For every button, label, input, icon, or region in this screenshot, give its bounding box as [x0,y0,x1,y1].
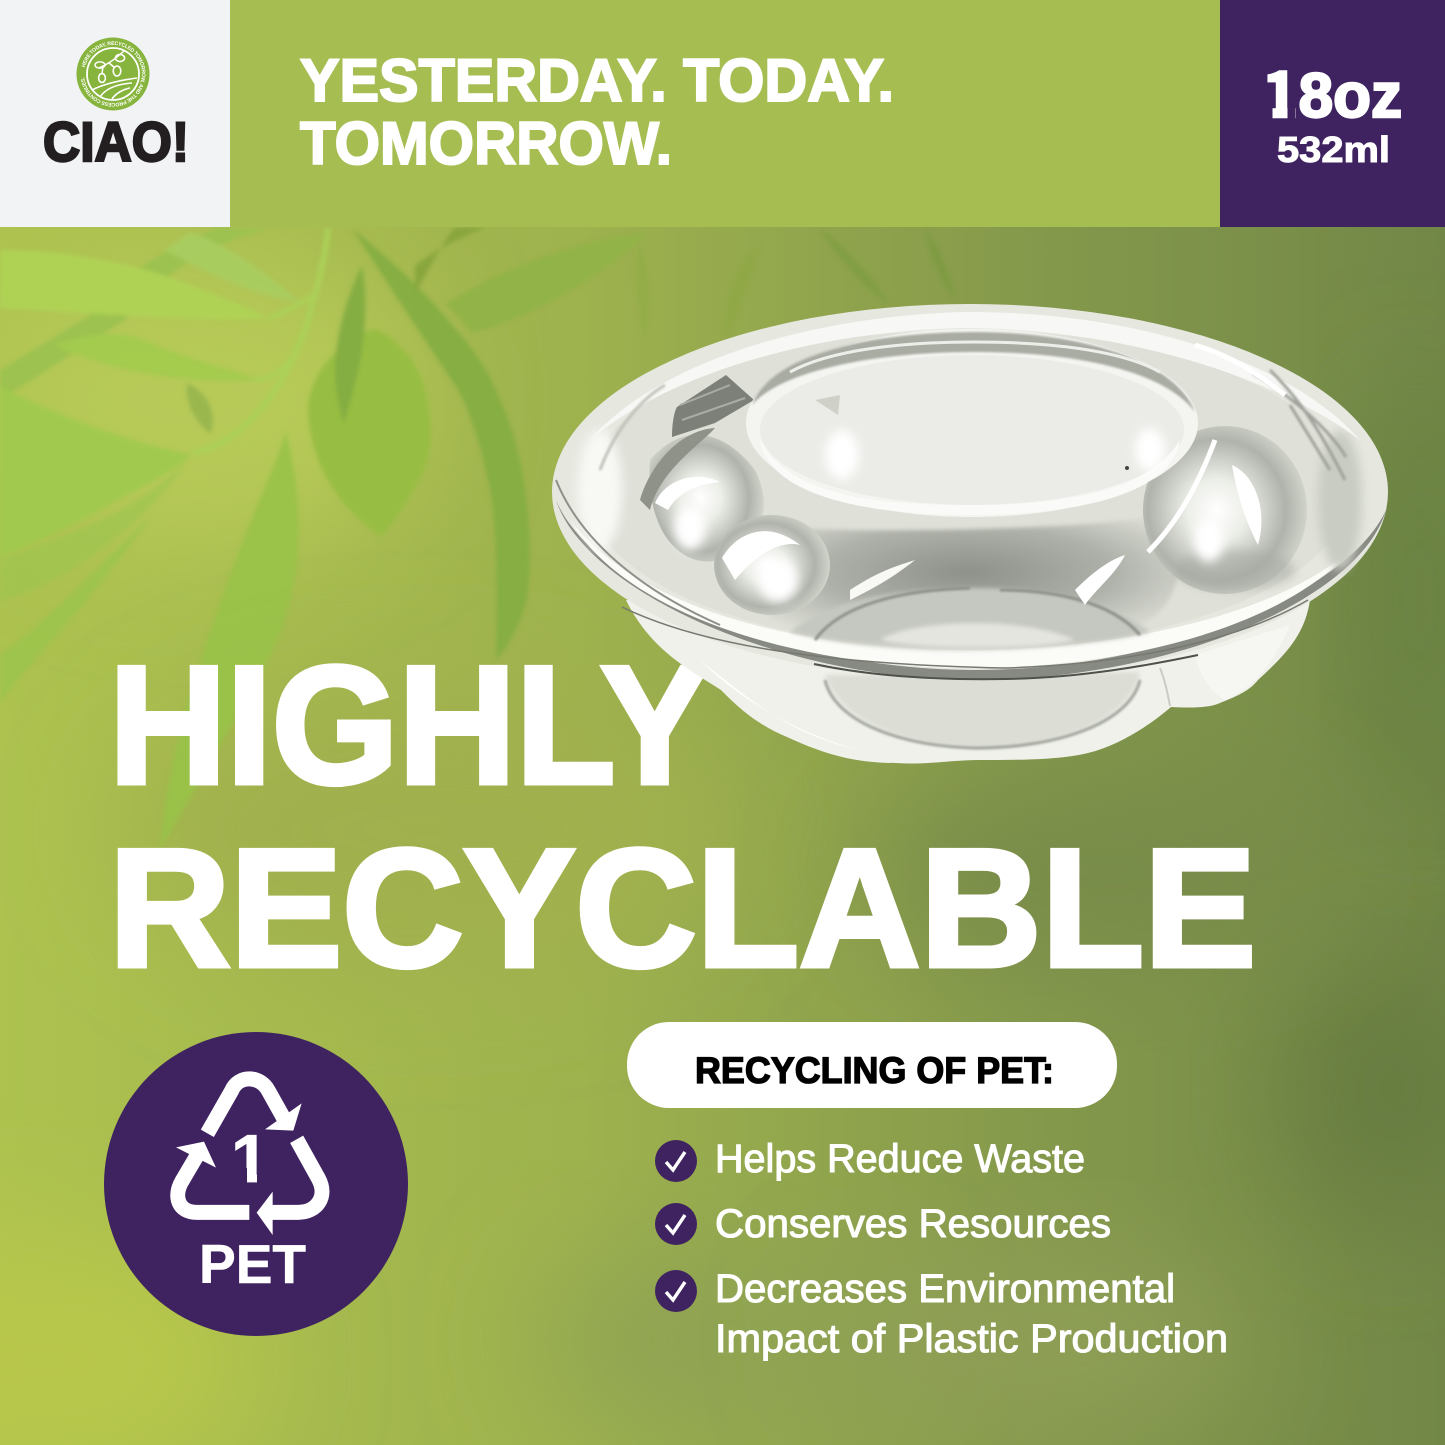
header: size badge: 532ml [1277,129,1390,170]
headline: RECYCLABLE [109,814,1256,1002]
header: size badge [1220,0,1445,227]
benefit: decreases environmental impact: Impact of Plastic Production [715,1317,1228,1361]
PET recycling badge [104,1032,408,1336]
header: tagline band: TOMORROW. [300,110,672,177]
right dome [1143,426,1307,594]
headline [109,631,1256,1002]
benefit: helps reduce waste: Helps Reduce Waste [715,1137,1085,1181]
rim highlights [590,312,1360,440]
product: clear plastic bowl with lid [552,304,1388,763]
header: logo panel [0,0,230,227]
dark reflection patch [672,375,754,437]
PET recycling badge: 1 [231,1121,269,1197]
benefit: decreases environmental impact: Decreases Environmental [715,1267,1175,1311]
PET recycling badge: PET [199,1233,306,1295]
header: tagline band: YESTERDAY. TODAY. [300,47,894,114]
benefit: decreases environmental impact [655,1267,1228,1361]
headline: HIGHLY [109,631,709,819]
benefit list [655,1137,1228,1361]
centre lid cup [746,329,1198,517]
bowl base [626,600,1310,763]
icon: recycling triangle [176,1079,322,1235]
header: size badge: 18oz [1262,45,1402,136]
bowl rim [552,304,1388,680]
left domes [650,435,830,615]
logo wordmark: CIAO! [43,110,189,173]
callout heading pill [627,1022,1117,1108]
benefit: conserves resources: Conserves Resources [715,1202,1111,1246]
callout heading pill: RECYCLING OF PET: [695,1050,1054,1091]
lower well [739,515,1179,651]
logo badge with olive branch: HERE TODAY, RECYCLED TOMORROW, AND THE PROCESS CONTINUES. [81,41,146,107]
header: tagline band [230,0,1220,227]
lid interior [586,330,1350,650]
